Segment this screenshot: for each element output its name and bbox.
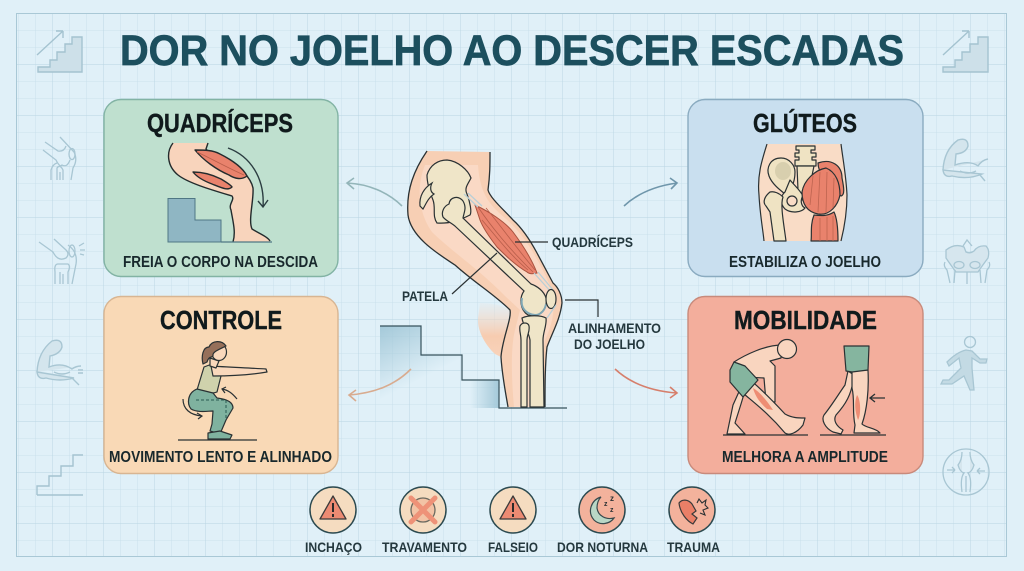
floor line — [820, 434, 886, 436]
caption: MOVIMENTO LENTO E ALINHADO — [109, 449, 332, 466]
panel: mobilidade — [688, 296, 923, 474]
icon: dor noturna: z — [610, 507, 614, 514]
patella — [546, 290, 556, 308]
icon: bent leg — [169, 143, 270, 242]
label: trauma: TRAUMA — [667, 539, 720, 555]
floor line — [723, 434, 808, 436]
icon: standing leg stretch — [823, 346, 880, 434]
icon: knee alignment circle right — [943, 449, 989, 495]
label: patela: PATELA — [402, 288, 448, 304]
heading: controle: CONTROLE — [160, 305, 282, 335]
arrow: to mobilidade — [615, 369, 677, 398]
tendons — [464, 193, 553, 292]
icon: pelvis right — [944, 240, 990, 284]
icon: trauma — [669, 487, 715, 533]
leg outline — [408, 151, 562, 407]
arrow: to controle — [349, 369, 411, 401]
leg silhouette — [408, 151, 562, 407]
arrows: movement — [183, 387, 237, 419]
icon: stairs bottom left — [37, 455, 83, 495]
muscle quadriceps — [475, 205, 537, 274]
fibula — [520, 323, 529, 407]
panel: gluteos — [688, 100, 923, 276]
label: quadriceps — [515, 234, 633, 250]
alignment guide — [196, 400, 226, 418]
caption: MELHORA A AMPLITUDE — [722, 449, 888, 466]
calf shadow — [478, 303, 510, 358]
title: DOR NO JOELHO AO DESCER ESCADAS — [120, 27, 904, 75]
label: inchaco: INCHAÇO — [305, 539, 362, 555]
heading: gluteos: GLÚTEOS — [753, 108, 857, 138]
label: patela — [402, 253, 497, 304]
pelvis bone — [427, 160, 471, 223]
icon: runner right — [941, 336, 987, 390]
icon: dor noturna — [579, 487, 625, 533]
arrow: downward motion — [228, 148, 268, 207]
label: quadriceps: QUADRÍCEPS — [552, 234, 633, 250]
arrow: to gluteos — [624, 178, 677, 206]
heading: quadriceps: QUADRÍCEPS — [147, 108, 293, 138]
label: alinhamento do joelho: ALINHAMENTO — [568, 320, 661, 336]
icon: knee left 2 — [39, 239, 85, 284]
floor line — [178, 439, 257, 441]
icon: inchaco — [310, 487, 356, 533]
icon: dor noturna: z — [604, 501, 608, 508]
femur — [442, 197, 546, 316]
arrow: to quadriceps — [347, 178, 402, 206]
icon: knee left 1 — [43, 137, 76, 180]
warning signs row — [305, 487, 720, 555]
icon: stair step — [168, 198, 221, 242]
icon: stairs up top right — [943, 31, 988, 72]
label: alinhamento do joelho — [565, 300, 661, 352]
arrow: pointing at calf — [870, 394, 885, 402]
icon: flexed arm right — [943, 139, 988, 181]
tibia — [522, 316, 546, 407]
panel: controle — [104, 296, 338, 474]
muscle fibres — [810, 172, 834, 241]
stairs — [380, 326, 499, 408]
icon: stairs up top left — [37, 31, 82, 72]
caption: FREIA O CORPO NA DESCIDA — [123, 254, 318, 271]
heading: mobilidade: MOBILIDADE — [734, 305, 877, 335]
chart: central knee anatomy — [380, 151, 567, 408]
icon: falseio — [490, 487, 536, 533]
icon: forward bend stretch — [727, 340, 805, 434]
cartilage — [522, 298, 546, 315]
label: alinhamento do joelho: DO JOELHO — [574, 336, 645, 352]
icon: squat figure — [189, 342, 267, 439]
floor line — [221, 241, 272, 243]
label: travamento: TRAVAMENTO — [382, 539, 467, 555]
icon: flexed arm left — [37, 340, 83, 385]
caption: ESTABILIZA O JOELHO — [729, 254, 881, 271]
panel: quadriceps — [104, 100, 338, 276]
icon: travamento — [400, 487, 446, 533]
label: dor noturna: DOR NOTURNA — [557, 539, 648, 555]
icon: hip anatomy — [759, 144, 847, 241]
icon: dor noturna: z — [610, 494, 614, 503]
inner flesh highlight — [420, 165, 554, 407]
label: falseio: FALSEIO — [488, 539, 538, 555]
